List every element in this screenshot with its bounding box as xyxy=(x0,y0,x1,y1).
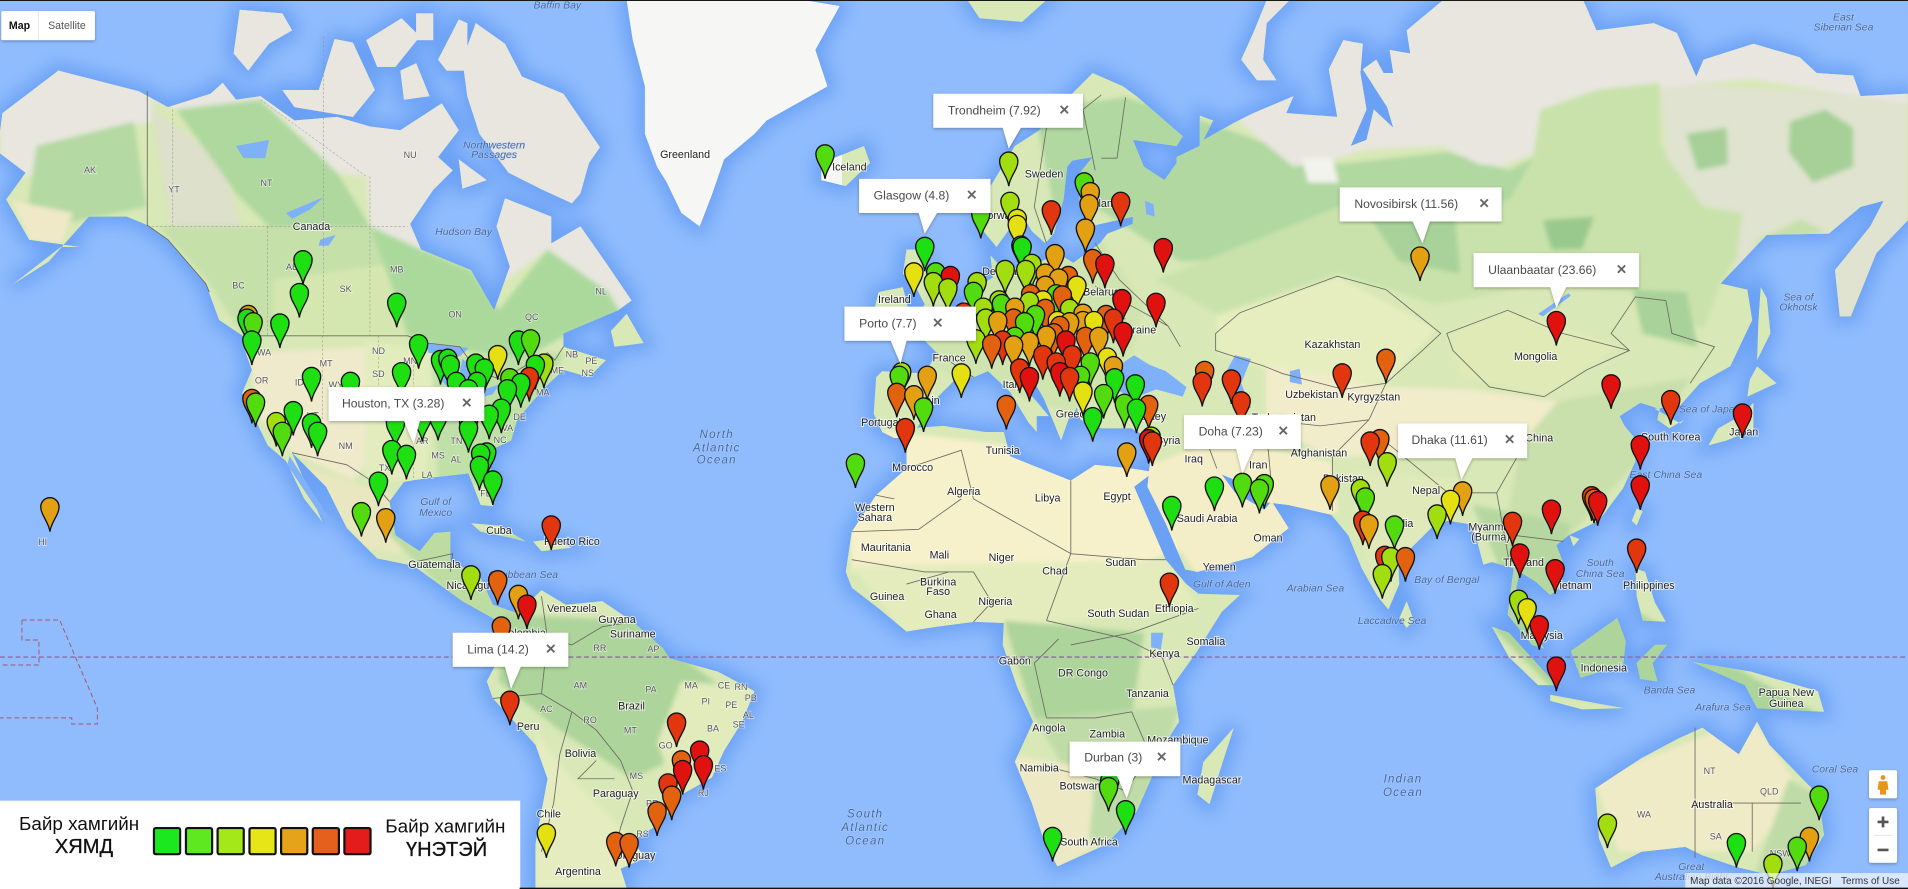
callout: Houston: Houston, TX (3.28) xyxy=(342,397,444,411)
callout: Novosibirsk: Novosibirsk (11.56) xyxy=(1354,197,1458,211)
state and province labels: MB xyxy=(390,265,403,275)
sea and ocean labels: Passages xyxy=(471,150,518,161)
sea and ocean labels: Great xyxy=(1678,862,1706,873)
legend: most expensive label: ҮНЭТЭЙ xyxy=(406,837,487,861)
sea and ocean labels: Ocean xyxy=(697,455,737,467)
sea and ocean labels: East China Sea xyxy=(1630,470,1702,481)
country labels: Mongolia xyxy=(1514,351,1557,363)
state and province labels: OR xyxy=(255,375,269,385)
country labels: Kazakhstan xyxy=(1304,339,1360,351)
sea and ocean labels: Okhotsk xyxy=(1779,302,1818,313)
country labels: Zambia xyxy=(1089,728,1125,740)
callout: Ulaanbaatar: Ulaanbaatar (23.66) xyxy=(1488,263,1596,277)
country labels: Sahara xyxy=(858,512,892,524)
country labels: Egypt xyxy=(1103,491,1131,503)
country labels: Colombia xyxy=(501,627,546,639)
country labels: Guatemala xyxy=(408,559,461,571)
country labels: Vietnam xyxy=(1553,580,1592,592)
inland seas and lakes xyxy=(236,140,1571,650)
state and province labels: PE xyxy=(725,700,737,710)
country labels: (Burma) xyxy=(1471,531,1510,543)
country labels: Uruguay xyxy=(615,850,656,862)
map pins: Europe xyxy=(816,145,1172,488)
country labels: Brazil xyxy=(618,700,645,712)
state and province labels: VA xyxy=(502,423,513,433)
state and province labels: NU xyxy=(404,150,417,160)
state and province labels: AP xyxy=(647,644,659,654)
state and province labels: SA xyxy=(1710,832,1722,842)
legend: cheapest label xyxy=(19,813,139,858)
country labels: Tunisia xyxy=(986,445,1020,457)
state and province labels: MT xyxy=(624,726,637,736)
callout: Trondheim: ✕ xyxy=(1059,102,1070,117)
state and province labels: NB xyxy=(566,350,578,360)
sea and ocean labels: Baffin Bay xyxy=(533,1,582,12)
country labels: Kenya xyxy=(1149,648,1180,660)
state and province labels: DE xyxy=(513,412,526,422)
country labels: Greece xyxy=(1056,408,1091,420)
country labels: India xyxy=(1390,518,1413,530)
map attribution: Map data ©2016 Google, INEGI xyxy=(1690,876,1832,887)
country labels: Italy xyxy=(1003,379,1023,391)
callout: Porto: Porto (7.7) xyxy=(859,316,917,330)
country labels: Puerto Rico xyxy=(544,536,600,548)
country labels: Saudi Arabia xyxy=(1177,513,1237,525)
icon: pegman xyxy=(1869,770,1897,798)
country labels: Spain xyxy=(912,395,940,407)
country labels: Pakistan xyxy=(1323,473,1364,485)
state and province labels: NT xyxy=(261,178,273,188)
state and province labels: ON xyxy=(448,310,462,320)
sea and ocean labels: Sea of Japan xyxy=(1679,404,1741,415)
country labels: Canada xyxy=(293,221,330,233)
sea and ocean labels: East xyxy=(1833,13,1855,24)
state and province labels: AM xyxy=(574,681,587,691)
sea and ocean labels: Gulf of Aden xyxy=(1193,580,1251,591)
map attribution xyxy=(1685,873,1908,888)
sea and ocean labels: Laccadive Sea xyxy=(1358,616,1427,627)
sea and ocean labels: Indian xyxy=(1384,773,1422,785)
country labels: Denmark xyxy=(982,266,1026,278)
country labels: Myanmar xyxy=(1468,522,1513,534)
state and province labels: NM xyxy=(339,441,353,451)
country labels: Greenland xyxy=(660,149,710,161)
country labels: Turkmenistan xyxy=(1252,412,1316,424)
state and province labels: AL xyxy=(743,710,754,720)
state and province labels: AB xyxy=(286,262,298,272)
state and province labels: PA xyxy=(645,684,657,694)
sea and ocean labels: Gulf of xyxy=(420,497,452,508)
country labels: Papua New xyxy=(1759,687,1814,699)
sea and ocean labels: China Sea xyxy=(1576,569,1625,580)
sea and ocean labels: Ocean xyxy=(1383,787,1423,799)
sea and ocean labels: Northwestern xyxy=(463,140,525,151)
callout: Porto xyxy=(844,307,976,364)
state and province labels: BA xyxy=(707,723,719,733)
state and province labels: ES xyxy=(714,763,726,773)
country labels: Ireland xyxy=(878,294,911,306)
state and province labels: AK xyxy=(84,165,96,175)
country labels: Paraguay xyxy=(593,788,639,800)
map type control xyxy=(1,11,95,40)
state and province labels xyxy=(38,150,1791,859)
country labels: Iceland xyxy=(832,161,867,173)
sea and ocean labels: Atlantic xyxy=(692,442,741,454)
zoom control xyxy=(1869,808,1897,863)
map type control: Map xyxy=(9,20,31,32)
state and province labels: SK xyxy=(340,284,352,294)
legend: colour scale xyxy=(154,828,371,854)
state and province labels: NL xyxy=(595,286,607,296)
state and province labels: TX xyxy=(379,463,390,473)
state and province labels: PI xyxy=(702,697,710,707)
map pins: Africa and Middle East xyxy=(1043,427,1273,862)
country labels: Mozambique xyxy=(1147,734,1209,746)
country labels: Faso xyxy=(926,586,950,598)
callout: Durban: Durban (3) xyxy=(1084,751,1142,765)
state and province labels: MN xyxy=(403,356,417,366)
callout: Dhaka: Dhaka (11.61) xyxy=(1412,433,1488,447)
country labels: Oman xyxy=(1253,532,1283,544)
country labels: Norway xyxy=(980,210,1017,222)
callout: Dhaka xyxy=(1398,423,1527,479)
country labels: Ethiopia xyxy=(1155,603,1194,615)
country labels: Morocco xyxy=(892,462,933,474)
state and province labels: RS xyxy=(636,829,649,839)
country labels: Thailand xyxy=(1503,557,1544,569)
country labels: Argentina xyxy=(555,866,601,878)
country labels: Somalia xyxy=(1187,636,1225,648)
state and province labels: PB xyxy=(745,693,757,703)
legend panel xyxy=(0,801,520,889)
country labels: South Africa xyxy=(1060,837,1118,849)
country labels: Peru xyxy=(517,721,539,733)
state and province labels: PR xyxy=(646,799,659,809)
sea and ocean labels: Banda Sea xyxy=(1644,686,1696,697)
state and province labels: WA xyxy=(257,347,271,357)
country labels: Angola xyxy=(1032,722,1066,734)
country labels: Malaysia xyxy=(1521,630,1563,642)
country labels: Cuba xyxy=(486,525,512,537)
country labels: Libya xyxy=(1035,492,1061,504)
country labels: Madagascar xyxy=(1183,775,1242,787)
country labels: Nigeria xyxy=(978,596,1012,608)
country labels: Iran xyxy=(1249,459,1267,471)
state and province labels: SE xyxy=(733,720,745,730)
callout: Porto: ✕ xyxy=(932,315,943,330)
state and province labels: BC xyxy=(232,280,245,290)
country labels: Ukraine xyxy=(1119,324,1156,336)
country labels: Turkey xyxy=(1134,411,1167,423)
callout: Doha: Doha (7.23) xyxy=(1199,425,1263,439)
country labels: Mali xyxy=(930,550,949,562)
state and province labels: CE xyxy=(718,681,730,691)
state and province labels: ME xyxy=(551,366,564,376)
state and province labels: AR xyxy=(416,436,429,446)
sea and ocean labels: Bay of Bengal xyxy=(1414,575,1480,586)
country labels: Philippines xyxy=(1623,580,1675,592)
map pins: North America xyxy=(41,251,560,605)
country labels: DR Congo xyxy=(1058,668,1108,680)
country labels: Indonesia xyxy=(1581,663,1627,675)
country labels: Portugal xyxy=(861,417,901,429)
state and province labels: MA xyxy=(536,387,549,397)
state and province labels: SD xyxy=(372,369,385,379)
state and province labels: WA xyxy=(1637,810,1651,820)
sea and ocean labels: Siberian Sea xyxy=(1814,22,1874,33)
sea and ocean labels: Hudson Bay xyxy=(435,227,493,238)
country labels: Tanzania xyxy=(1126,688,1169,700)
sea and ocean labels: Coral Sea xyxy=(1812,765,1858,776)
country labels: South Sudan xyxy=(1087,608,1149,620)
state and province labels: MT xyxy=(320,358,333,368)
country labels: Guinea xyxy=(870,591,904,603)
country labels: Belarus xyxy=(1083,287,1119,299)
state and province labels: RN xyxy=(735,682,748,692)
state and province labels: NC xyxy=(494,435,507,445)
callout: Ulaanbaatar xyxy=(1474,253,1639,308)
country labels: Gabon xyxy=(999,655,1031,667)
state and province labels: YT xyxy=(168,184,180,194)
state and province labels: QLD xyxy=(1760,787,1779,797)
country labels: Niger xyxy=(989,552,1015,564)
state and province labels: NS xyxy=(581,368,594,378)
state and province labels: FL xyxy=(480,488,491,498)
country labels: Botswana xyxy=(1060,781,1107,793)
country labels: Mauritania xyxy=(861,542,911,554)
state and province labels: MA xyxy=(684,681,698,691)
state and province labels: MS xyxy=(431,451,445,461)
country labels: Japan xyxy=(1729,427,1758,439)
sea and ocean labels: Arafura Sea xyxy=(1694,703,1751,714)
sea and ocean labels: Atlantic xyxy=(840,822,889,834)
country labels: Burkina xyxy=(920,576,956,588)
map type control: Satellite xyxy=(48,20,86,32)
country labels: Bolivia xyxy=(565,748,596,760)
callout: Lima: ✕ xyxy=(545,641,556,656)
country labels: France xyxy=(932,352,966,364)
country labels: Chad xyxy=(1042,565,1068,577)
state and province labels: LA xyxy=(422,470,433,480)
country labels: Venezuela xyxy=(547,603,597,615)
legend: cheapest label: ХЯМД xyxy=(55,836,113,858)
sea and ocean labels: South xyxy=(1586,558,1614,569)
callout: Novosibirsk: ✕ xyxy=(1478,196,1490,211)
callout: Houston xyxy=(329,387,484,444)
country labels: Uzbekistan xyxy=(1285,389,1338,401)
callout: Glasgow: Glasgow (4.8) xyxy=(874,189,949,203)
state and province labels: TN xyxy=(450,436,462,446)
state and province labels: NT xyxy=(1704,766,1716,776)
sea and ocean labels: Ocean xyxy=(845,835,885,847)
state and province labels: UT xyxy=(307,411,319,421)
country labels: Sweden xyxy=(1025,169,1063,181)
country labels: Australia xyxy=(1691,799,1733,811)
callout: Trondheim xyxy=(933,94,1083,148)
country labels: Syria xyxy=(1156,435,1180,447)
callout: Novosibirsk xyxy=(1340,187,1502,243)
state and province labels: QC xyxy=(525,312,539,322)
country labels xyxy=(293,149,1814,878)
country labels: Afghanistan xyxy=(1291,447,1347,459)
legend: cheapest label: Байр хамгийн xyxy=(19,813,139,834)
state and province labels: PE xyxy=(585,356,597,366)
callout: Glasgow xyxy=(859,179,991,234)
country labels: Guinea xyxy=(1769,698,1804,710)
sea and ocean labels xyxy=(419,1,1874,883)
country labels: Nicaragua xyxy=(447,580,495,592)
country labels: Ghana xyxy=(925,609,957,621)
callout: Glasgow: ✕ xyxy=(966,188,977,203)
country labels: South Korea xyxy=(1641,431,1700,443)
country labels: Suriname xyxy=(610,629,656,641)
map pins: South America xyxy=(492,585,712,868)
map pins: Australia xyxy=(1598,786,1828,888)
callout: Lima: Lima (14.2) xyxy=(467,642,529,656)
callout: Durban xyxy=(1070,742,1180,798)
legend: most expensive label xyxy=(385,815,505,861)
map attribution: Terms of Use xyxy=(1841,876,1900,887)
callout: Doha: ✕ xyxy=(1278,424,1289,439)
country labels: China xyxy=(1525,433,1553,445)
country labels: Western xyxy=(855,502,895,514)
state and province labels: AL xyxy=(451,454,462,464)
country labels: Yemen xyxy=(1203,562,1236,574)
country labels: Namibia xyxy=(1020,762,1059,774)
country labels: Iraq xyxy=(1185,453,1203,465)
country labels: Finland xyxy=(1084,198,1119,210)
sea and ocean labels: Arabian Sea xyxy=(1286,583,1344,594)
sea and ocean labels: Australian Bight xyxy=(1654,872,1729,883)
state and province labels: GO xyxy=(659,740,673,750)
state and province labels: NSW xyxy=(1770,849,1791,859)
callout: Trondheim: Trondheim (7.92) xyxy=(948,103,1041,117)
callout: Durban: ✕ xyxy=(1156,750,1167,765)
sea and ocean labels: South xyxy=(847,809,883,821)
country labels: Nepal xyxy=(1412,485,1440,497)
map pins: Asia xyxy=(1193,247,1752,691)
state and province labels: AC xyxy=(540,704,553,714)
callout: Houston: ✕ xyxy=(461,396,472,411)
state and province labels: HI xyxy=(38,537,47,547)
callout: Lima xyxy=(453,633,568,689)
callout: Doha xyxy=(1184,415,1301,473)
equator and date line xyxy=(0,620,1908,724)
state and province labels: WY xyxy=(329,380,343,390)
country labels: Sudan xyxy=(1105,557,1136,569)
state and province labels: MS xyxy=(630,771,643,781)
state and province labels: ID xyxy=(295,378,304,388)
sea and ocean labels: Sea of xyxy=(1783,293,1815,304)
sea and ocean labels: North xyxy=(700,429,734,441)
sea and ocean labels: Caribbean Sea xyxy=(488,570,558,581)
state and province labels: ND xyxy=(372,346,385,356)
state and province labels: RR xyxy=(593,643,607,653)
state and province labels: RO xyxy=(583,715,597,725)
country labels: Chile xyxy=(537,809,561,821)
country labels: Algeria xyxy=(947,486,980,498)
sea and ocean labels: Mexico xyxy=(419,508,452,519)
callout: Dhaka: ✕ xyxy=(1504,432,1515,447)
callout: Ulaanbaatar: ✕ xyxy=(1616,262,1627,277)
country labels: Guyana xyxy=(598,614,636,626)
state and province labels: RJ xyxy=(698,788,709,798)
legend: most expensive label: Байр хамгийн xyxy=(385,815,505,836)
country labels: Kyrgyzstan xyxy=(1347,391,1400,403)
